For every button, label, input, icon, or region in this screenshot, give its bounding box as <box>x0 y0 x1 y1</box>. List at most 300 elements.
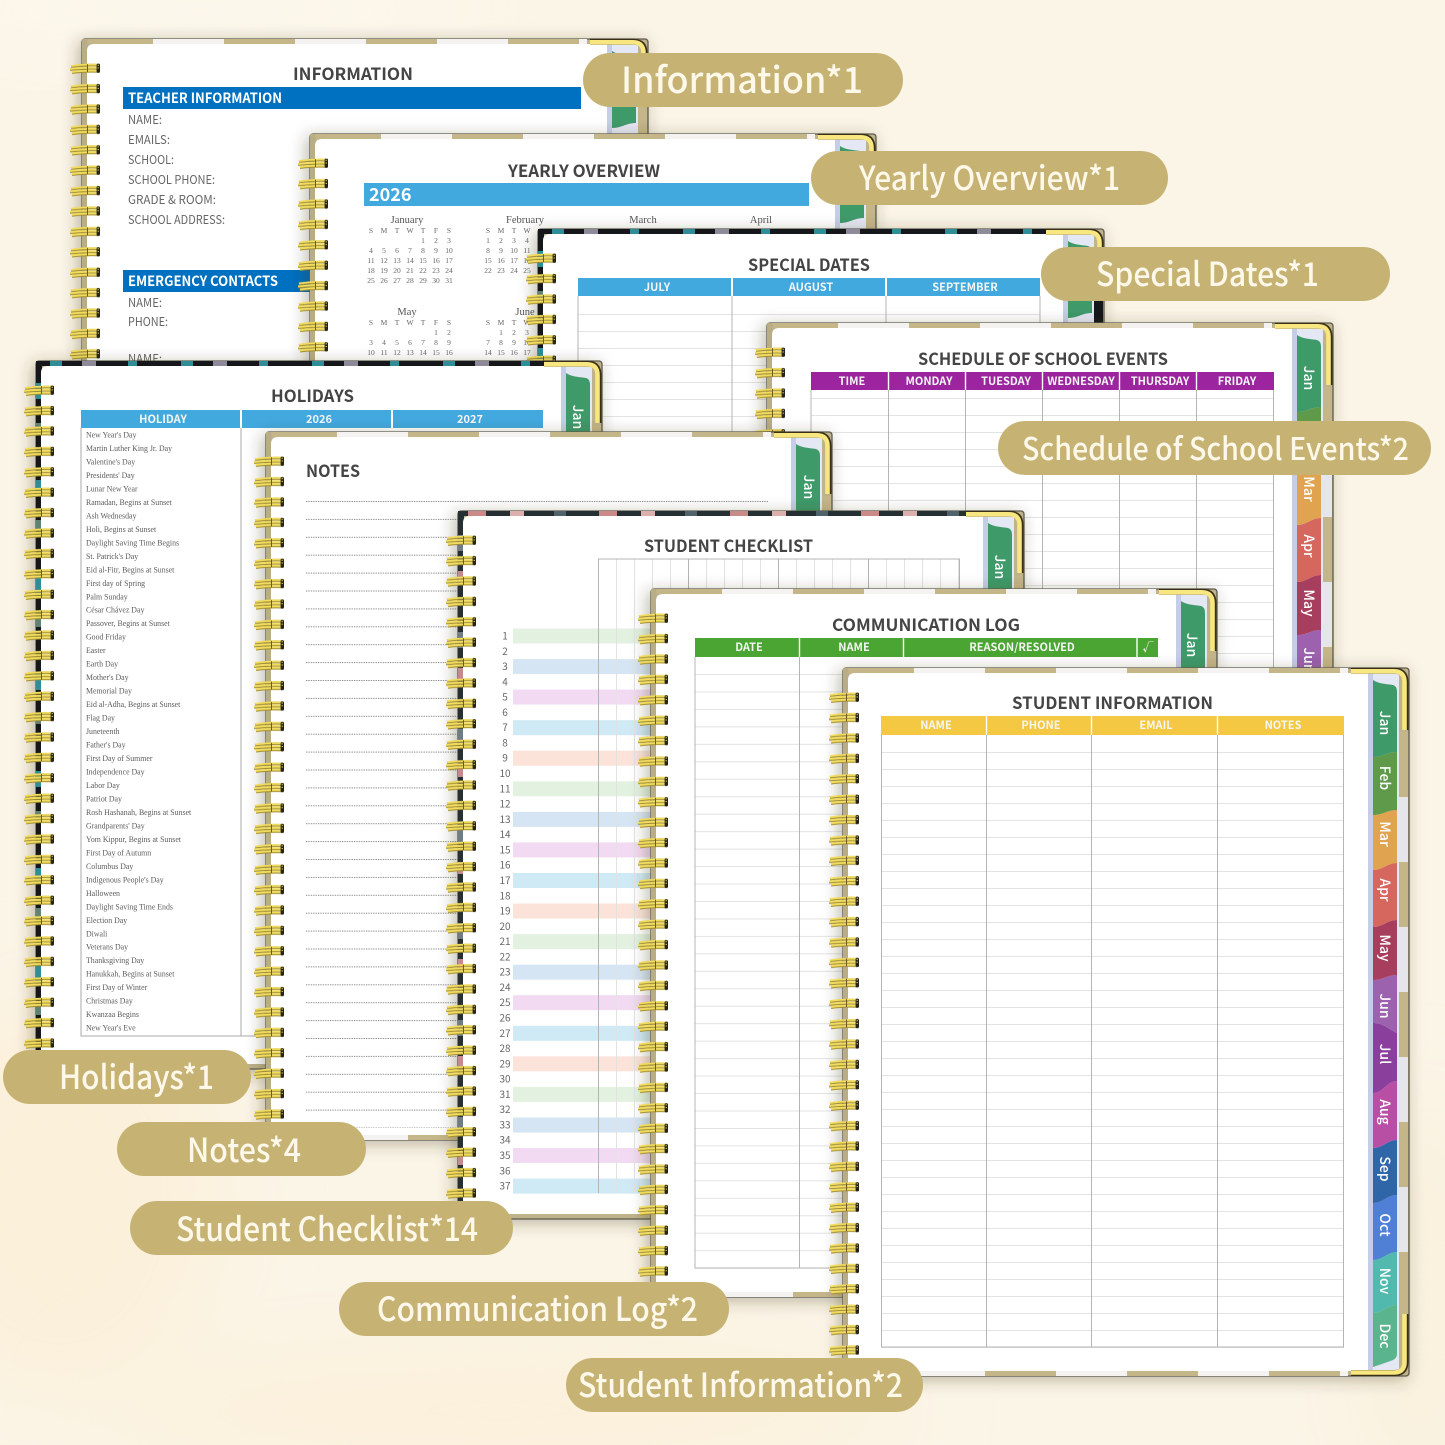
tab labels: Sep <box>1375 1156 1395 1182</box>
row numbers: 20 <box>499 918 511 933</box>
page <box>271 435 831 1137</box>
notebook: special dates <box>526 229 1104 937</box>
row numbers: 28 <box>499 1040 511 1055</box>
row numbers: 8 <box>502 734 508 750</box>
row numbers: 24 <box>499 979 511 994</box>
Jan tab <box>566 373 590 450</box>
cover <box>82 39 648 747</box>
cover <box>310 134 876 842</box>
holiday list: Thanksgiving Day <box>86 956 144 965</box>
tab labels: Mar <box>1299 476 1319 502</box>
month names: February <box>506 215 545 226</box>
table header: MONDAY <box>905 373 953 389</box>
Jan tab <box>840 146 864 223</box>
table header: √ <box>1142 639 1154 655</box>
row numbers: 33 <box>499 1116 511 1132</box>
cover <box>767 323 1333 1031</box>
table header: FRIDAY <box>1218 373 1257 389</box>
special dates content <box>578 251 1040 444</box>
schedule content <box>811 335 1321 688</box>
teacher fields: GRADE & ROOM: <box>128 191 216 208</box>
Jan tab <box>988 523 1012 600</box>
holiday list <box>86 430 192 1033</box>
student information content <box>881 680 1397 1367</box>
grid columns <box>598 559 961 1193</box>
calendar: June: 17 <box>523 348 531 357</box>
Jan tab label: Jan <box>990 555 1010 579</box>
calendar: January: 22 <box>419 266 427 275</box>
calendar: January: 28 <box>406 276 414 285</box>
label: Information*1: Information*1 <box>621 52 863 104</box>
calendar: June: 10 <box>523 338 531 347</box>
label: Yearly Overview*1: Yearly Overview*1 <box>858 152 1120 200</box>
table header: AUGUST <box>788 279 833 295</box>
table header <box>578 278 1040 296</box>
row numbers: 37 <box>499 1178 511 1193</box>
tab labels: Apr <box>1299 534 1319 558</box>
tab labels: Jun <box>1299 647 1319 673</box>
calendar: May: 12 <box>434 328 451 337</box>
cover stripes <box>767 323 1272 1031</box>
holiday list: Indigenous People's Day <box>86 875 164 884</box>
tab labels: Aug <box>1375 1099 1395 1125</box>
cover <box>266 432 832 1140</box>
table rows <box>881 735 1344 1348</box>
calendar: May: 14 <box>419 348 427 357</box>
notebook: notes <box>254 432 832 1140</box>
calendar: June: 8 <box>499 338 503 347</box>
teacher fields: SCHOOL: <box>128 151 174 168</box>
heading: INFORMATION <box>293 60 413 85</box>
month tabs <box>1373 680 1397 1367</box>
tab labels: Nov <box>1375 1268 1395 1295</box>
notebook: student information <box>829 668 1409 1376</box>
row numbers: 21 <box>499 933 511 948</box>
coil binding <box>298 158 329 831</box>
holidays content <box>81 382 588 1036</box>
holiday list: First day of Spring <box>86 579 145 588</box>
notebook: schedule of school events <box>755 323 1333 1031</box>
Jan tab label: Jan <box>799 475 819 499</box>
heading: SPECIAL DATES <box>748 251 870 276</box>
cover stripes <box>651 589 1156 1297</box>
coil binding <box>638 613 669 1286</box>
holiday list: Lunar New Year <box>86 484 138 493</box>
tab labels: Jul <box>1375 1044 1395 1064</box>
calendar: June: 14 <box>484 348 492 357</box>
calendar: January: 14 <box>406 256 414 265</box>
coil binding <box>254 456 285 1129</box>
holiday list: Holi, Begins at Sunset <box>86 525 157 534</box>
holiday list: Rosh Hashanah, Begins at Sunset <box>86 808 192 817</box>
calendar: January: 123 <box>421 236 451 245</box>
calendar: January: 27 <box>393 276 401 285</box>
calendar: May: 13 <box>406 348 414 357</box>
floral cover strips <box>538 229 1058 937</box>
holiday list: Juneteenth <box>86 727 120 736</box>
row numbers: 16 <box>499 857 511 872</box>
label: Student Checklist*14: Student Checklist*14 <box>176 1203 478 1251</box>
holiday list: Eid al-Fitr, Begins at Sunset <box>86 565 175 574</box>
month names: May <box>397 307 417 318</box>
holiday list: Labor Day <box>86 781 120 790</box>
emergency contacts bar <box>123 270 581 292</box>
calendar: February: 25 <box>523 266 531 275</box>
month names: April <box>750 215 772 226</box>
holiday list: St. Patrick's Day <box>86 552 138 561</box>
holiday list: Passover, Begins at Sunset <box>86 619 171 628</box>
page <box>772 326 1332 1028</box>
calendar: May: 3456789 <box>369 338 451 347</box>
notes content <box>306 457 819 1128</box>
table header: 2027 <box>457 411 483 427</box>
heading: HOLIDAYS <box>271 382 354 407</box>
calendar: January: 19 <box>380 266 388 275</box>
row numbers: 30 <box>499 1071 511 1086</box>
calendar: June: 7 <box>486 338 490 347</box>
table header: EMAIL <box>1139 717 1173 733</box>
table header <box>811 372 1274 390</box>
colored row bands <box>513 628 653 1194</box>
coil binding <box>70 63 101 736</box>
Jan tab <box>1181 601 1205 678</box>
tab labels: Dec <box>1375 1324 1395 1348</box>
heading: NOTES <box>306 457 360 482</box>
tab labels: Jan <box>1299 366 1319 390</box>
calendar: May: SMTWTFS <box>369 318 451 327</box>
cover stripes <box>82 39 587 747</box>
yearly overview content <box>364 157 809 357</box>
cover <box>458 511 1024 1219</box>
calendar: January: 25 <box>367 276 375 285</box>
calendar: February: 10 <box>510 246 518 255</box>
heading: STUDENT CHECKLIST <box>644 532 813 557</box>
table header: THURSDAY <box>1131 373 1190 389</box>
holiday list: Easter <box>86 646 106 655</box>
calendar: February: 11 <box>523 246 531 255</box>
holiday list: Flag Day <box>86 714 115 723</box>
cover <box>651 589 1217 1297</box>
calendar: February: 22 <box>484 266 492 275</box>
cover <box>843 668 1409 1376</box>
label: Schedule of School Events*2: Schedule of School Events*2 <box>1022 424 1409 469</box>
row numbers: 1 <box>502 628 508 642</box>
month names: March <box>629 215 657 226</box>
calendar: June <box>484 318 531 357</box>
calendar: January: 456789 <box>369 246 438 255</box>
heading: COMMUNICATION LOG <box>832 611 1020 636</box>
heading: YEARLY OVERVIEW <box>507 157 660 182</box>
calendar: January: 12 <box>380 256 388 265</box>
calendar: February: 9 <box>499 246 503 255</box>
tab labels: May <box>1299 589 1319 617</box>
table header <box>881 716 1344 735</box>
notebook: communication log <box>638 589 1217 1297</box>
floral cover strips <box>458 511 978 1219</box>
table header <box>81 410 543 428</box>
holiday list: First Day of Autumn <box>86 848 151 857</box>
row numbers: 19 <box>499 902 511 918</box>
table header: DATE <box>735 639 763 655</box>
row numbers: 18 <box>499 887 511 902</box>
calendar: January: 10 <box>445 246 453 255</box>
month names <box>391 215 772 318</box>
calendar: January: 21 <box>406 266 414 275</box>
holiday list: Patriot Day <box>86 794 122 804</box>
holiday list: Diwali <box>86 929 108 938</box>
calendar: May: 10 <box>367 348 375 357</box>
page <box>41 364 601 1066</box>
Jan tab <box>796 444 820 521</box>
row numbers: 17 <box>499 872 511 887</box>
label: Notes*4: Notes*4 <box>187 1124 301 1172</box>
calendar: January: 31 <box>445 276 453 285</box>
page <box>848 671 1408 1373</box>
holiday list: Palm Sunday <box>86 592 128 601</box>
row numbers <box>499 628 511 1193</box>
tab labels: Apr <box>1375 878 1395 902</box>
label: Holidays*1: Holidays*1 <box>59 1051 214 1099</box>
calendar: February <box>484 226 531 275</box>
calendar: February: 1234 <box>486 236 529 245</box>
calendar: January: 30 <box>432 276 440 285</box>
row numbers: 22 <box>499 948 511 963</box>
month names: June <box>515 307 535 318</box>
row numbers: 5 <box>502 689 508 704</box>
holiday list: Hanukkah, Begins at Sunset <box>86 970 175 979</box>
holiday list: Daylight Saving Time Begins <box>86 538 179 547</box>
table header: NAME <box>920 717 952 733</box>
tab labels: Oct <box>1375 1213 1395 1237</box>
holiday list: Earth Day <box>86 660 118 669</box>
teacher information bar: TEACHER INFORMATION <box>128 88 282 108</box>
calendar: January <box>367 226 453 285</box>
calendar: February: 18 <box>523 256 531 265</box>
calendar: June: 9 <box>512 338 516 347</box>
notebook: student checklist <box>446 511 1024 1219</box>
holiday list: New Year's Eve <box>86 1024 136 1033</box>
calendar: June: 15 <box>497 348 505 357</box>
month tabs <box>1297 335 1321 688</box>
calendar: June: 123 <box>499 328 529 337</box>
teacher fields: NAME: <box>128 111 162 128</box>
page <box>87 42 647 744</box>
calendar: May: 12 <box>393 348 401 357</box>
row numbers: 3 <box>502 658 508 673</box>
label: Holidays*1 <box>3 1050 251 1104</box>
cover stripes <box>310 134 815 842</box>
holiday list: Independence Day <box>86 768 145 776</box>
holiday list: Election Day <box>86 916 127 925</box>
notebook: holidays <box>24 361 602 1069</box>
tab labels: Jan <box>1375 711 1395 735</box>
page <box>463 514 1023 1216</box>
table frame <box>81 428 543 1036</box>
Jan tab label: Jan <box>1182 633 1202 657</box>
table header: JULY <box>644 279 671 295</box>
calendar: January: 13 <box>393 256 401 265</box>
dotted lines <box>306 501 768 1128</box>
label: Communication Log*2: Communication Log*2 <box>377 1283 698 1331</box>
row numbers: 2 <box>502 643 508 658</box>
holiday list: First Day of Winter <box>86 983 148 992</box>
row numbers: 23 <box>499 964 511 979</box>
student checklist content <box>499 532 1010 1194</box>
teacher fields: EMAILS: <box>128 131 170 148</box>
calendar: February: 17 <box>510 256 518 265</box>
table header: NOTES <box>1265 717 1302 733</box>
teacher fields: SCHOOL ADDRESS: <box>128 211 225 228</box>
coil binding <box>24 385 55 1058</box>
row numbers: 4 <box>502 673 508 688</box>
calendar: January: 29 <box>419 276 427 285</box>
tab labels: Mar <box>1375 821 1395 847</box>
cover stripes <box>843 668 1348 1376</box>
cover <box>36 361 602 1069</box>
notebook: yearly overview <box>298 134 876 842</box>
row numbers: 34 <box>499 1132 511 1147</box>
calendar: January: 15 <box>419 256 427 265</box>
table header: 2026 <box>306 411 332 427</box>
tab labels: Feb <box>1375 766 1395 790</box>
row numbers: 7 <box>502 719 508 734</box>
holiday list: Memorial Day <box>86 687 132 696</box>
information page content <box>123 60 581 367</box>
table header <box>695 638 1158 657</box>
holiday list: Grandparents' Day <box>86 821 145 830</box>
holiday list: César Chávez Day <box>86 606 144 615</box>
calendar: January: 17 <box>445 256 453 265</box>
calendar: February: 24 <box>510 266 518 275</box>
calendar: February: SMTW <box>486 226 531 235</box>
calendar: January: 26 <box>380 276 388 285</box>
holiday list: Halloween <box>86 889 120 898</box>
emergency fields: NAME: <box>128 350 162 367</box>
month names: January <box>391 215 424 226</box>
calendar: January: 11 <box>367 256 375 265</box>
row numbers: 32 <box>499 1101 511 1116</box>
table rows <box>695 657 1158 1270</box>
holiday list: Ramadan, Begins at Sunset <box>86 498 173 507</box>
label: Notes*4 <box>117 1122 366 1176</box>
year bar: 2026 <box>369 181 411 207</box>
heading: STUDENT INFORMATION <box>1012 689 1213 714</box>
row numbers: 13 <box>499 811 511 826</box>
calendar: June: 16 <box>510 348 518 357</box>
table header: REASON/RESOLVED <box>969 639 1075 655</box>
emergency fields: PHONE: <box>128 313 168 330</box>
table rows <box>811 390 1274 670</box>
emergency fields <box>128 294 168 367</box>
emergency fields: NAME: <box>128 294 162 311</box>
calendar: January: 20 <box>393 266 401 275</box>
calendar: January: 18 <box>367 266 375 275</box>
calendar: February: 15 <box>484 256 492 265</box>
row numbers: 26 <box>499 1010 511 1024</box>
dark side strip <box>1094 293 1103 937</box>
Jan tab <box>612 51 636 128</box>
cover <box>538 229 1104 937</box>
row numbers: 35 <box>499 1147 511 1162</box>
coil binding <box>446 535 477 1208</box>
table header: TUESDAY <box>981 373 1031 389</box>
communication log content <box>695 611 1202 1270</box>
calendar: May: 16 <box>445 348 453 357</box>
calendar: January: SMTWTFS <box>369 226 451 235</box>
row numbers: 36 <box>499 1162 511 1177</box>
Jan tab label: Jan <box>568 405 588 429</box>
holiday list: Daylight Saving Time Ends <box>86 902 173 911</box>
holiday list: Ash Wednesday <box>86 511 136 520</box>
Jan tab <box>1068 241 1092 318</box>
holiday list: First Day of Summer <box>86 754 153 763</box>
page <box>315 137 875 839</box>
teacher fields <box>128 111 225 228</box>
row numbers: 9 <box>502 750 508 765</box>
holiday list: New Year's Day <box>86 430 137 440</box>
calendar: February: 16 <box>497 256 505 265</box>
holiday list: Christmas Day <box>86 997 133 1006</box>
holiday list: Good Friday <box>86 633 126 642</box>
label: Special Dates*1: Special Dates*1 <box>1096 248 1319 296</box>
row numbers: 29 <box>499 1055 511 1070</box>
notebook: information <box>70 39 648 747</box>
holiday list: Yom Kippur, Begins at Sunset <box>86 835 182 844</box>
row numbers: 15 <box>499 841 511 856</box>
heading: SCHEDULE OF SCHOOL EVENTS <box>918 345 1168 370</box>
row numbers: 10 <box>499 765 511 780</box>
row numbers: 11 <box>499 780 511 795</box>
calendar: May <box>367 318 453 357</box>
holiday list: Martin Luther King Jr. Day <box>86 444 172 453</box>
tab labels <box>1375 711 1395 1348</box>
calendar: January: 24 <box>445 266 453 275</box>
tab labels: May <box>1375 934 1395 962</box>
emergency contacts bar: EMERGENCY CONTACTS <box>128 271 278 291</box>
calendar: May: 15 <box>432 348 440 357</box>
table header: NAME <box>838 639 870 655</box>
holiday list: Mother's Day <box>86 673 129 682</box>
holiday list: Veterans Day <box>86 943 128 952</box>
row numbers: 6 <box>502 704 508 719</box>
table header: WEDNESDAY <box>1047 373 1115 389</box>
page <box>543 232 1103 934</box>
calendar: January: 16 <box>432 256 440 265</box>
table header: HOLIDAY <box>139 411 187 427</box>
label: Student Information*2: Student Information*2 <box>578 1359 903 1407</box>
table header: TIME <box>839 373 866 389</box>
tab labels: Jun <box>1375 993 1395 1019</box>
teacher fields: SCHOOL PHONE: <box>128 171 215 188</box>
coil binding <box>755 347 786 1020</box>
holiday list: Kwanzaa Begins <box>86 1010 139 1019</box>
holiday list: Father's Day <box>86 740 126 750</box>
holiday list: Presidents' Day <box>86 471 135 480</box>
row numbers: 31 <box>499 1086 511 1101</box>
row numbers: 12 <box>499 796 511 811</box>
coil binding <box>526 253 557 926</box>
calendar: June: SMTW <box>486 318 531 327</box>
cover stripes <box>266 432 771 1140</box>
label: Special Dates*1 <box>1041 247 1390 301</box>
row numbers: 25 <box>499 994 511 1009</box>
teacher information bar <box>123 87 581 109</box>
tab labels <box>1299 366 1319 673</box>
calendar: May: 11 <box>380 348 388 357</box>
table header: SEPTEMBER <box>932 279 998 295</box>
calendar: February: 23 <box>497 266 505 275</box>
calendar: January: 23 <box>432 266 440 275</box>
